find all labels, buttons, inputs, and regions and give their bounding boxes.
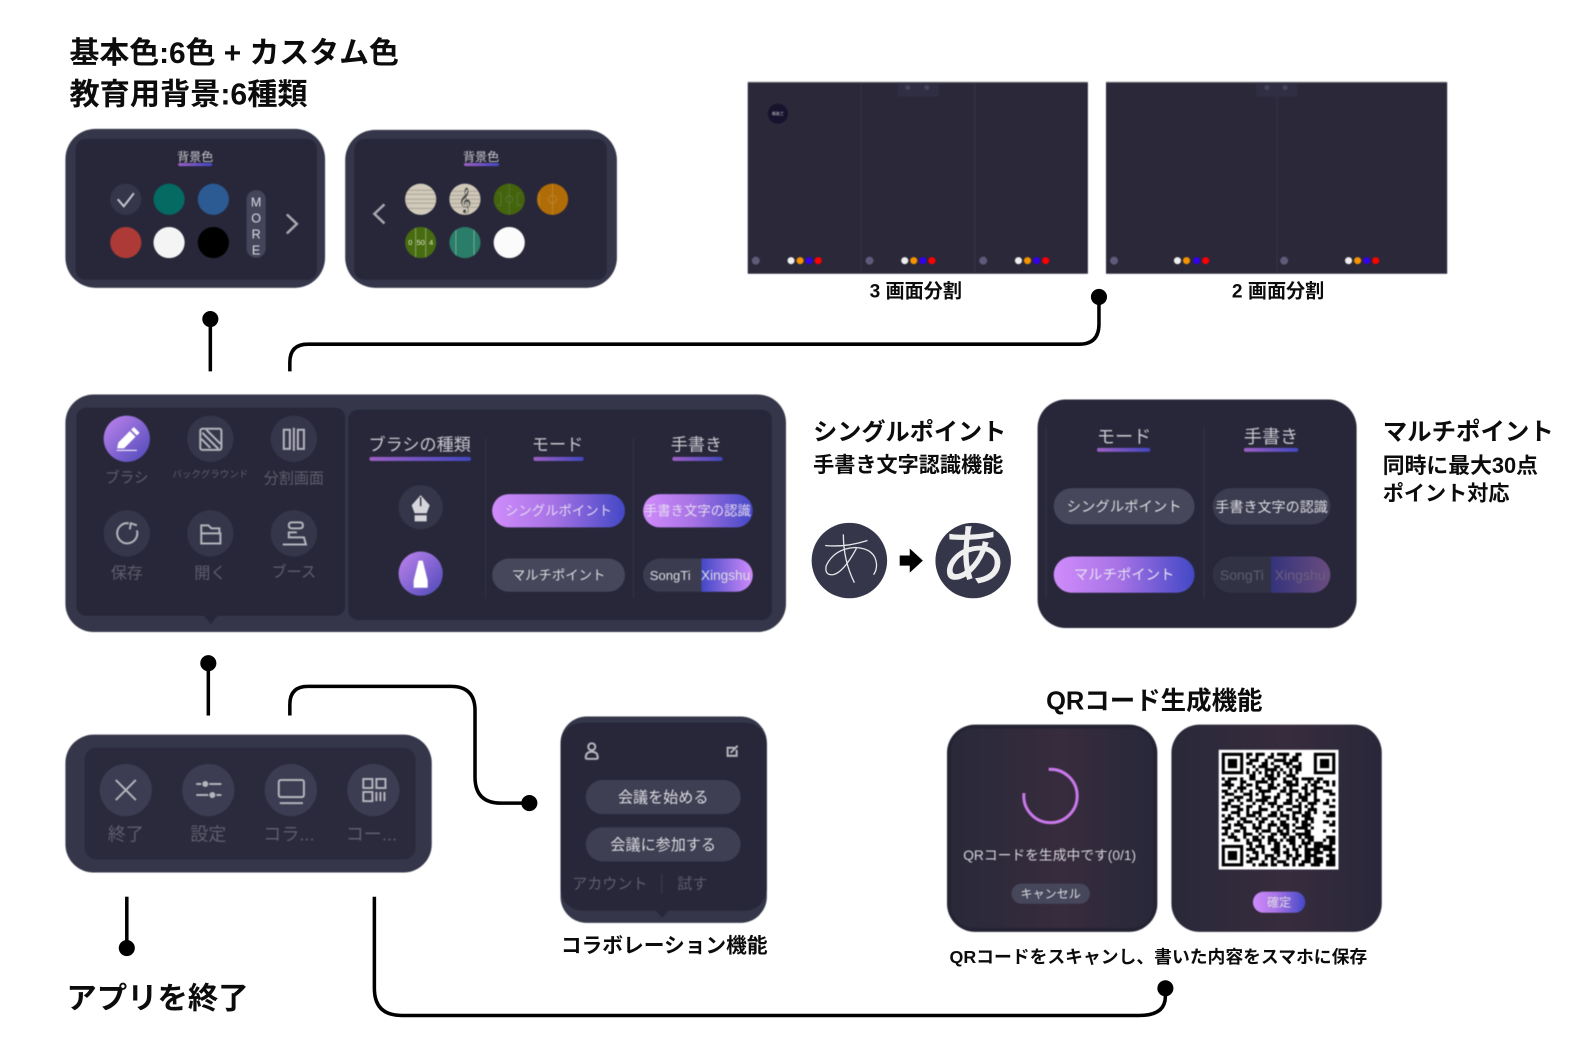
panel: collaboration menu: 会議を始める <box>618 789 708 807</box>
panel: app toolbar: コー... <box>346 824 397 844</box>
panel: collaboration menu: 試す <box>677 876 707 893</box>
connector: exit <box>119 897 135 956</box>
icon: arrow <box>900 548 923 573</box>
panel: background colour picker: 背景色 <box>177 150 213 164</box>
panel: educational backgrounds: 背景色 <box>463 150 499 164</box>
panel: collaboration menu <box>561 717 767 923</box>
text: multi point <box>1383 418 1554 506</box>
icon: handwritten character <box>812 523 887 598</box>
panel: multi point mode: モード <box>1097 427 1151 447</box>
panel: background colour picker <box>65 129 325 288</box>
panel: two-way split screenshot <box>1106 82 1447 274</box>
connector: colours to toolbar <box>202 311 218 371</box>
title: colours and backgrounds: 基本色:6色 + カスタム色 <box>69 37 399 70</box>
connector: split screen <box>290 289 1107 371</box>
panel: multi point mode: SongTi <box>1220 567 1264 583</box>
heading: QR code generation: QRコード生成機能 <box>1046 687 1262 715</box>
connector: collaboration <box>290 686 537 811</box>
panel: toolbar menu: 開く <box>194 565 226 583</box>
text: multi point: 同時に最大30点 <box>1383 453 1538 478</box>
panel: collaboration menu: 会議に参加する <box>610 836 716 854</box>
panel: brush settings: シングルポイント <box>505 504 612 519</box>
panel: multi point mode: 手書き <box>1244 427 1298 447</box>
title: colours and backgrounds <box>69 37 399 112</box>
panel: educational backgrounds <box>345 130 617 288</box>
panel: toolbar menu: ブース <box>272 563 316 581</box>
title: colours and backgrounds: 教育用背景:6種類 <box>69 78 308 112</box>
panel: brush settings: 手書き文字の認識 <box>644 504 752 519</box>
panel: QR generating: QRコードを生成中です(0/1) <box>963 848 1136 863</box>
QR code <box>1222 754 1335 865</box>
panel: toolbar menu: 分割画面 <box>264 471 324 488</box>
panel: three-way split screenshot <box>748 82 1088 274</box>
panel: three-way split screenshot: 格致工 <box>772 110 784 116</box>
panel: app toolbar: コラ... <box>263 824 314 844</box>
panel: app toolbar: 設定 <box>190 824 226 844</box>
text: multi point: ポイント対応 <box>1383 482 1510 506</box>
panel: educational backgrounds: 0 50 4 <box>408 238 433 247</box>
panel: brush settings: SongTi <box>650 568 691 583</box>
panel: toolbar menu: ブラシ <box>105 469 149 487</box>
panel: toolbar menu <box>76 408 345 624</box>
panel: QR generating: キャンセル <box>1020 887 1081 901</box>
panel: brush settings: ブラシの種類 <box>369 434 471 454</box>
panel: main toolbar <box>65 395 786 632</box>
panel: toolbar menu: バックグラウンド <box>172 469 248 481</box>
caption: two-way split: 2 画面分割 <box>1232 280 1324 302</box>
panel: multi point mode <box>1038 400 1357 628</box>
panel: QR result: 確定 <box>1267 895 1291 910</box>
QR code: right-hand modules <box>1314 782 1335 865</box>
connector: toolbar to main menu <box>200 655 216 716</box>
panel: brush settings: 手書き <box>671 435 722 454</box>
text: single point: 手書き文字認識機能 <box>813 453 1003 477</box>
panel: toolbar menu: 保存 <box>111 565 143 583</box>
text: single point: シングルポイント <box>813 418 1006 446</box>
panel: QR result <box>1171 725 1382 932</box>
panel: background colour picker: O <box>251 211 261 225</box>
panel: multi point mode: 手書き文字の認識 <box>1215 499 1328 515</box>
icon: recognized character: あ <box>940 521 1006 595</box>
panel: app toolbar: 終了 <box>108 824 144 844</box>
caption: QR usage: QRコードをスキャンし、書いた内容をスマホに保存 <box>949 946 1367 967</box>
panel: QR generating <box>947 725 1157 932</box>
panel: background colour picker: E <box>252 244 260 258</box>
panel: brush settings: Xingshu <box>701 568 750 583</box>
panel: brush settings <box>348 410 772 620</box>
panel: brush settings: マルチポイント <box>512 568 605 583</box>
panel: background colour picker: R <box>252 228 261 242</box>
panel: background colour picker: M <box>251 195 261 209</box>
panel: educational backgrounds: 𝄞 <box>458 187 471 213</box>
connector: QR code <box>374 897 1173 1015</box>
text: single point <box>813 418 1006 477</box>
panel: collaboration menu: アカウント <box>572 876 648 893</box>
panel: brush settings: モード <box>532 435 583 454</box>
text: multi point: マルチポイント <box>1383 418 1554 446</box>
panel: multi point mode: シングルポイント <box>1067 499 1182 516</box>
heading: exit the app: アプリを終了 <box>66 981 249 1015</box>
caption: collaboration: コラボレーション機能 <box>561 935 768 958</box>
panel: app toolbar <box>65 735 432 873</box>
panel: multi point mode: マルチポイント <box>1074 567 1174 584</box>
panel: multi point mode: Xingshu <box>1275 567 1326 583</box>
caption: three-way split: 3 画面分割 <box>870 280 962 302</box>
